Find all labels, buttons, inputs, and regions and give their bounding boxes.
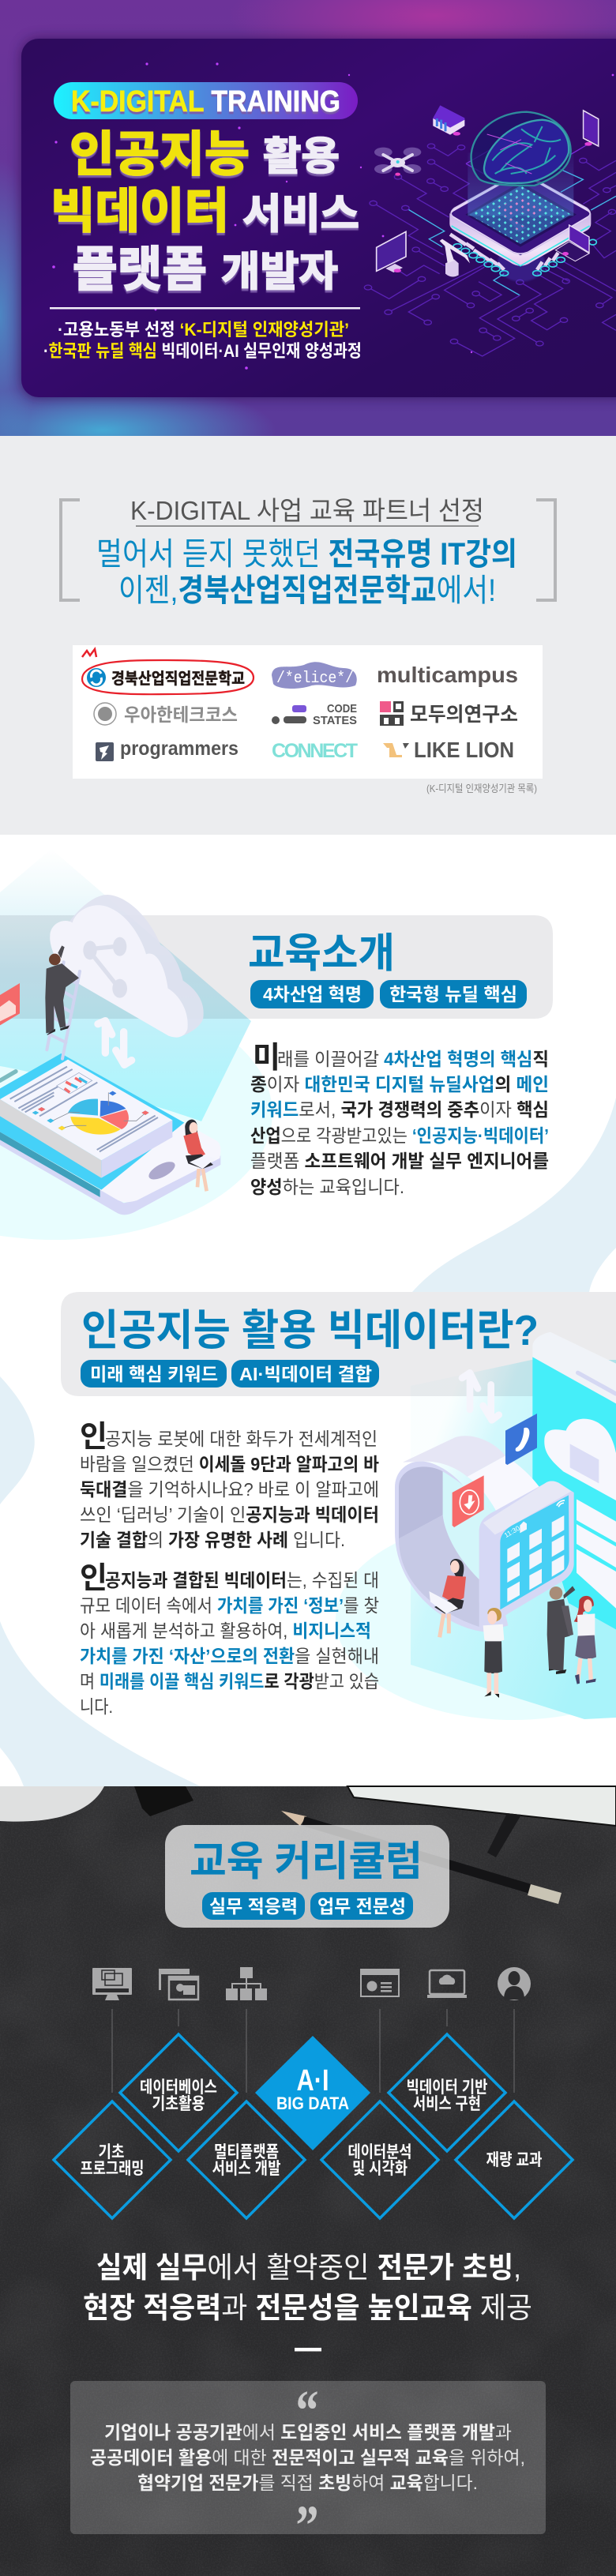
text block: big data paragraph one: 둑대결을 기억하시나요? 바로 이 알파고에 xyxy=(80,1479,379,1500)
data arrows xyxy=(98,1021,132,1065)
illustration: phone and cloud xyxy=(0,895,220,1215)
opening quote mark: “ xyxy=(295,2379,319,2442)
notebook xyxy=(347,1786,616,1826)
diamond: 기초 프로그래밍: 기초 xyxy=(98,2143,125,2161)
sparkles xyxy=(52,62,614,370)
badge: 4차산업 혁명 xyxy=(250,980,374,1008)
icon: org chart xyxy=(226,1967,267,2000)
icon: user xyxy=(498,1967,531,2000)
icon: report window xyxy=(361,1970,399,1996)
hero title: 활용 xyxy=(263,134,340,178)
badge: 4차산업 혁명: 4차산업 혁명 xyxy=(263,984,362,1004)
binder clip xyxy=(134,1786,193,1816)
man on ladder xyxy=(45,945,79,1035)
laptop xyxy=(555,225,589,261)
text block: big data paragraph two: 규모 데이터 속에서 가치를 가진 ‘정보’를 찾 xyxy=(80,1595,379,1616)
quote text: 공공데이터 활용에 대한 전문적이고 실무적 교육을 위하여, xyxy=(90,2447,525,2468)
icon: windows xyxy=(159,1969,198,2000)
text block: big data paragraph two xyxy=(80,1562,379,1717)
heading: 인공지능 활용 빅데이터란?: 인공지능 활용 빅데이터란? xyxy=(81,1307,539,1354)
quote text: 기업이나 공공기관에서 도입중인 서비스 플랫폼 개발과 xyxy=(104,2422,512,2443)
logo: elice xyxy=(272,662,357,689)
hero title: 인공지능 xyxy=(69,127,250,181)
chip pins xyxy=(450,235,596,276)
badge: 업무 전문성 xyxy=(310,1892,413,1920)
building icon xyxy=(433,105,464,136)
panel: education intro header xyxy=(0,915,553,1019)
diamond: 빅데이터 기반 서비스 구현 xyxy=(389,2034,505,2151)
diamond: 데이터분석 및 시각화 xyxy=(321,2101,438,2218)
illustration backdrop: data watch xyxy=(336,1360,616,1720)
text block: big data paragraph two: 인 xyxy=(80,1562,107,1595)
woman with red hair xyxy=(574,1596,596,1684)
section background: white xyxy=(0,835,616,1786)
partner tagline: 이젠,경북산업직업전문학교에서! xyxy=(118,573,496,608)
hero section xyxy=(0,0,616,478)
download card xyxy=(453,1475,484,1527)
phone call card xyxy=(505,1414,537,1465)
text block: big data paragraph one: 쓰인 ‘딥러닝’ 기술이 인공지능과 빅데이터 xyxy=(80,1504,379,1525)
heading: 교육 커리큘럼: 교육 커리큘럼 xyxy=(190,1839,423,1885)
quote text: 협약기업 전문가를 직접 초빙하여 교육합니다. xyxy=(137,2473,478,2493)
hero title: 플랫폼 xyxy=(73,242,207,296)
hero title: 개발자 xyxy=(221,250,338,295)
man pointing xyxy=(547,1586,575,1674)
pencil xyxy=(281,1811,562,1904)
summary text: 실제 실무에서 활약중인 전문가 초빙, xyxy=(96,2251,521,2284)
diamond: 데이터분석 및 시각화: 및 시각화 xyxy=(352,2160,408,2178)
badge: 업무 전문성: 업무 전문성 xyxy=(317,1896,406,1917)
hero subtitle xyxy=(43,320,362,361)
logo: connect: CONNECT xyxy=(272,740,358,762)
diamond: 기초 프로그래밍 xyxy=(54,2101,171,2218)
mug xyxy=(0,1786,104,1822)
hero card xyxy=(21,39,616,397)
large phone panel xyxy=(532,1332,616,1629)
seated woman xyxy=(429,1559,466,1637)
text block: big data paragraph two: 공지능과 결합된 빅데이터는, 수집된 대 xyxy=(105,1570,379,1590)
diamond: 데이터베이스 기초활용 xyxy=(120,2034,237,2151)
text block: big data paragraph two: 니다. xyxy=(80,1696,113,1717)
notebook ribbon xyxy=(487,1813,521,1857)
partner logos panel xyxy=(73,645,543,779)
pill: K-DIGITAL TRAINING: K-DIGITAL TRAINING xyxy=(71,85,340,118)
text block: intro: 종이자 대한민국 디지털 뉴딜사업의 메인 xyxy=(250,1074,549,1095)
phone body xyxy=(0,1053,220,1215)
document stack xyxy=(0,1060,172,1178)
badge: 실무 적응력: 실무 적응력 xyxy=(209,1896,298,1917)
red envelope card xyxy=(0,983,20,1025)
text block: intro: 미 xyxy=(253,1042,280,1075)
icons row xyxy=(92,1967,531,2000)
partner heading: K-DIGITAL 사업 교육 파트너 선정 xyxy=(130,496,484,525)
summary text: 현장 적응력과 전문성을 높인교육 제공 xyxy=(83,2292,532,2324)
logo: 경북산업직업전문학교: 경북산업직업전문학교 xyxy=(111,670,245,688)
decorative blue shape left xyxy=(0,1376,35,1504)
panel: big data header xyxy=(61,1292,616,1396)
text block: intro xyxy=(250,1042,549,1197)
circuit traces xyxy=(364,144,616,356)
diamond: 재량 교과: 재량 교과 xyxy=(486,2151,542,2169)
cloud xyxy=(50,895,204,1038)
decorative blue shape bottom xyxy=(0,1621,201,1786)
summary text xyxy=(83,2251,532,2324)
text block: big data paragraph one: 바람을 일으켰던 이세돌 9단과 알파고의 바 xyxy=(80,1454,379,1474)
illustration: smart watch xyxy=(395,1332,616,1698)
icon: laptop cloud xyxy=(427,1970,467,1998)
text block: big data paragraph one xyxy=(80,1421,379,1550)
diamond: 빅데이터 기반 서비스 구현: 빅데이터 기반 xyxy=(406,2078,488,2097)
badge: 한국형 뉴딜 핵심 xyxy=(380,980,527,1008)
text block: intro: 키워드로서, 국가 경쟁력의 중추이자 핵심 xyxy=(250,1099,549,1120)
diamond: 데이터베이스 기초활용: 기초활용 xyxy=(152,2095,205,2113)
monitor icon xyxy=(377,231,406,272)
partner tagline: 멀어서 듣지 못했던 전국유명 IT강의 xyxy=(96,537,517,572)
diamond: A·I BIG DATA: A·I xyxy=(297,2064,329,2097)
hero divider xyxy=(50,307,360,310)
badge: AI·빅데이터 결합 xyxy=(231,1360,379,1388)
quote text xyxy=(90,2422,525,2493)
bracket right xyxy=(536,500,555,600)
data arrows xyxy=(462,1372,499,1420)
ladder xyxy=(47,962,80,1059)
badge: 실무 적응력 xyxy=(202,1892,305,1920)
quote box xyxy=(70,2379,546,2557)
logo: code states: CODE xyxy=(327,702,357,715)
hero title: 빅데이터 xyxy=(51,184,229,238)
diamond: 데이터베이스 기초활용: 데이터베이스 xyxy=(140,2078,217,2097)
text block: big data paragraph two: 며 미래를 이끌 핵심 키워드로 각광받고 있습 xyxy=(80,1671,379,1692)
tablet icon xyxy=(584,111,599,146)
drone xyxy=(374,148,421,176)
watch face xyxy=(479,1481,574,1617)
diamond: 데이터분석 및 시각화: 데이터분석 xyxy=(347,2143,412,2161)
logo: multicampus: multicampus xyxy=(377,663,518,687)
logo: programmers: programmers xyxy=(120,738,239,760)
seated woman xyxy=(183,1120,216,1191)
diamond: 멀티플랫폼 서비스 개발: 서비스 개발 xyxy=(212,2160,281,2178)
partner tagline xyxy=(96,537,517,608)
watch face: 11:30 xyxy=(503,1524,521,1539)
partner section background xyxy=(0,436,616,835)
robot arm xyxy=(440,239,470,276)
curriculum section background xyxy=(0,1786,616,2576)
diamond: A·I BIG DATA xyxy=(255,2036,370,2150)
hero title: 서비스 xyxy=(242,192,359,238)
brain hologram xyxy=(471,112,571,186)
decorative blue shape xyxy=(412,1098,616,1292)
diamond: 기초 프로그래밍: 프로그래밍 xyxy=(81,2160,144,2178)
badge: 미래 핵심 키워드: 미래 핵심 키워드 xyxy=(90,1364,218,1384)
text block: intro: 양성하는 교육입니다. xyxy=(250,1177,404,1197)
logo: 우아한테크코스: 우아한테크코스 xyxy=(124,704,238,725)
hero subtitle: ·고용노동부 선정 ‘K-디지털 인재양성기관’ xyxy=(58,320,349,340)
diamond: 멀티플랫폼 서비스 개발: 멀티플랫폼 xyxy=(214,2143,279,2161)
closing quote mark: ” xyxy=(295,2494,319,2557)
illustration backdrop: light cone xyxy=(0,849,272,1240)
logo: 모두의연구소: 모두의연구소 xyxy=(410,704,518,726)
bracket left xyxy=(61,500,80,600)
panel: curriculum header xyxy=(165,1825,449,1928)
text block: big data paragraph two: 가치를 가진 ‘자산’으로의 전환을 실현해내 xyxy=(80,1646,379,1666)
badge: 한국형 뉴딜 핵심: 한국형 뉴딜 핵심 xyxy=(389,984,517,1004)
text block: big data paragraph one: 공지능 로봇에 대한 화두가 전세계적인 xyxy=(105,1429,377,1449)
logo: code states xyxy=(272,702,357,727)
text block: big data paragraph one: 인 xyxy=(80,1421,107,1454)
standing woman xyxy=(483,1608,504,1698)
logo: code states: STATES xyxy=(313,714,357,727)
diamond: 빅데이터 기반 서비스 구현: 서비스 구현 xyxy=(413,2095,481,2113)
circuit illustration xyxy=(364,105,616,356)
logo: like lion: LIKE LION xyxy=(414,738,514,762)
text block: big data paragraph two: 아 새롭게 분석하고 활용하여, 비지니스적 xyxy=(80,1620,371,1641)
diagram: curriculum diamonds xyxy=(54,2034,573,2218)
hero subtitle: ·한국판 뉴딜 핵심 빅데이터·AI 실무인재 양성과정 xyxy=(43,341,362,361)
strap xyxy=(395,1436,539,1632)
hero title xyxy=(51,127,359,296)
heading: 교육소개: 교육소개 xyxy=(248,931,395,977)
badge: 미래 핵심 키워드 xyxy=(81,1360,227,1388)
badge: AI·빅데이터 결합: AI·빅데이터 결합 xyxy=(239,1364,372,1384)
logo: elice: /*elice*/ xyxy=(276,670,354,688)
diamond: 멀티플랫폼 서비스 개발 xyxy=(188,2101,305,2218)
dash separator xyxy=(295,2348,321,2352)
logo: 경북산업직업전문학교 xyxy=(82,649,254,694)
logo caption: (K-디지털 인재양성기관 목록) xyxy=(426,783,537,794)
microchip xyxy=(449,152,591,282)
connector lines xyxy=(112,2009,514,2093)
text block: intro: 래를 이끌어갈 4차산업 혁명의 핵심직 xyxy=(277,1049,549,1069)
text block: intro: 산업으로 각광받고있는 ‘인공지능·빅데이터’ xyxy=(250,1125,549,1146)
diamond: A·I BIG DATA: BIG DATA xyxy=(276,2093,349,2113)
text block: big data paragraph one: 기술 결합의 가장 유명한 사례 입니다. xyxy=(80,1530,345,1550)
icon: monitor xyxy=(92,1968,132,2000)
desk objects xyxy=(0,1786,616,1904)
diamond: 재량 교과 xyxy=(456,2101,573,2218)
text block: intro: 플랫폼 소프트웨어 개발 실무 엔지니어를 xyxy=(250,1151,549,1171)
